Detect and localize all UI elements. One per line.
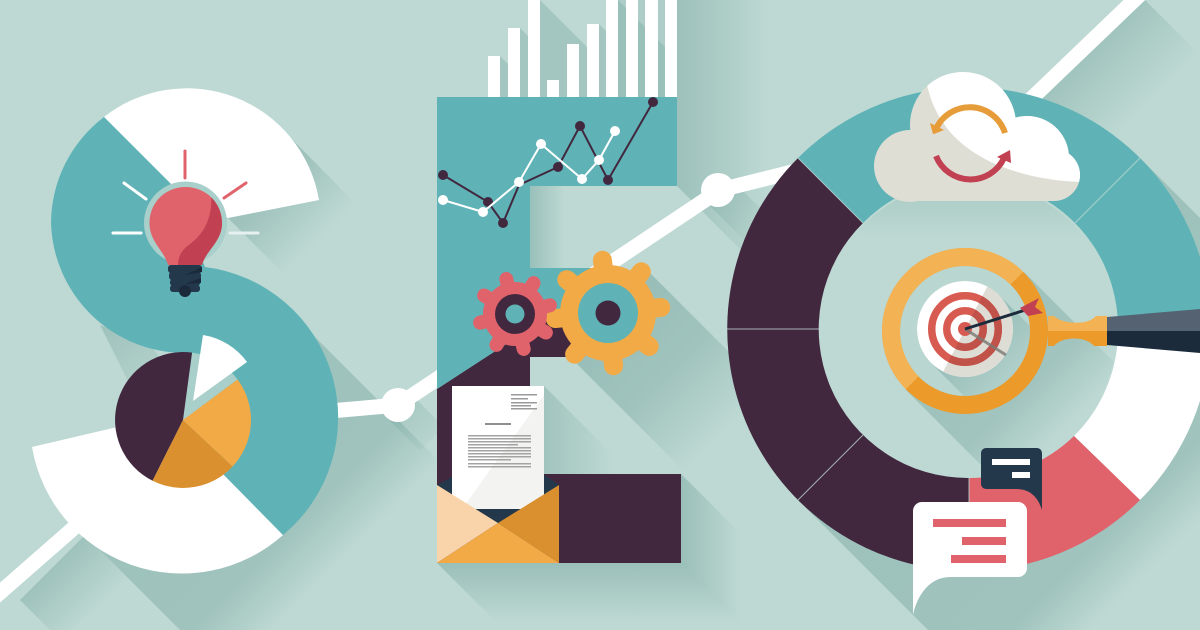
speech bubble: navy	[981, 448, 1042, 510]
icon: envelope with document	[437, 386, 559, 563]
arrow shadow	[965, 329, 1006, 355]
arrow in target	[965, 298, 1043, 329]
line node right	[701, 173, 735, 207]
white series	[438, 126, 620, 217]
O inner shade	[821, 181, 1117, 477]
pie well	[183, 353, 238, 420]
O dark segment	[727, 158, 969, 571]
S teal lower fill	[183, 267, 290, 475]
target shadow	[931, 295, 1030, 396]
pie dark slice	[115, 352, 192, 481]
sync arrow red	[936, 150, 1011, 179]
document title line	[485, 423, 511, 425]
S white upper wedge	[104, 88, 319, 218]
envelope right flap	[498, 485, 559, 563]
pie white exploded slice	[193, 335, 247, 401]
icon: cloud	[874, 72, 1080, 202]
envelope navy inner	[470, 510, 526, 525]
magnifier handle	[1107, 309, 1200, 353]
cloud light side	[927, 72, 1080, 182]
line node left	[381, 388, 415, 422]
pie chart	[115, 335, 251, 488]
bulb glass	[150, 187, 222, 265]
O separators	[727, 158, 1140, 571]
O hole	[819, 179, 1119, 479]
letter S	[32, 88, 338, 574]
icon: magnifying glass with target	[882, 248, 1200, 414]
dark series	[438, 97, 658, 228]
sync arrow orange	[930, 107, 1005, 134]
envelope left flap	[437, 485, 498, 563]
icon: light bulb	[113, 151, 258, 297]
bulb shade	[178, 197, 222, 265]
letter E	[437, 0, 681, 563]
icon: orange gear	[555, 260, 661, 366]
magnifier ring	[882, 248, 1048, 414]
O teal segment	[798, 87, 1200, 329]
S teal ribbon	[51, 117, 338, 535]
letter O	[727, 87, 1200, 571]
line chart	[438, 97, 658, 228]
envelope bottom flap	[437, 523, 559, 563]
magnifier lens	[900, 266, 1030, 396]
magnifier neck	[1048, 316, 1107, 346]
icon: red gear	[480, 279, 550, 349]
document	[452, 386, 544, 509]
E teal upper	[437, 97, 677, 389]
magnifier shadow	[906, 272, 1112, 465]
bulb base	[168, 265, 202, 297]
document header lines	[511, 394, 537, 410]
pie dark orange slice	[153, 420, 233, 488]
bulb halo	[144, 182, 227, 264]
E dark lower stem	[437, 305, 681, 563]
envelope back	[437, 474, 559, 530]
pie orange slice	[183, 380, 251, 466]
document body lines	[468, 435, 531, 468]
O white segment	[1074, 329, 1200, 500]
notch shade	[530, 186, 566, 268]
cloud body	[874, 72, 1080, 202]
bar chart	[488, 0, 677, 97]
target	[917, 281, 1013, 377]
S white lower wedge	[32, 424, 283, 574]
bulb rays	[113, 151, 258, 233]
speech bubble: white	[913, 502, 1027, 615]
O red segment	[969, 436, 1140, 571]
